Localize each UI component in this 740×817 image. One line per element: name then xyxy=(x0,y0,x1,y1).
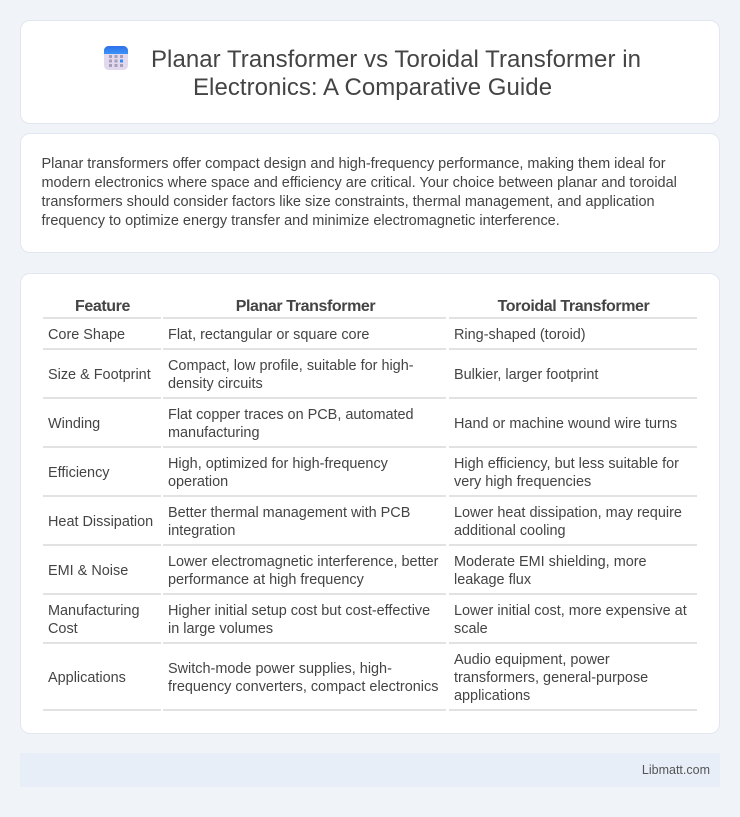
text: Compact, low profile, suitable for high- xyxy=(168,358,414,374)
text: High efficiency, but less suitable for xyxy=(454,456,679,472)
text: Better thermal management with PCB xyxy=(168,505,410,521)
text: frequency converters, compact electronics xyxy=(168,679,438,695)
row: Winding: Winding xyxy=(48,416,100,432)
row: Manufacturing Cost: Cost xyxy=(48,621,78,637)
text: scale xyxy=(454,621,488,637)
text: Ring-shaped (toroid) xyxy=(454,327,586,343)
text block: introduction: Planar transformers offer compact design and high-frequency performance, making them ideal for xyxy=(42,156,666,172)
text: in large volumes xyxy=(168,621,273,637)
table header: Feature: Feature xyxy=(75,298,130,315)
text: additional cooling xyxy=(454,523,566,539)
table header: Planar Transformer: Planar Transformer xyxy=(236,298,375,315)
title: Planar Transformer vs Toroidal Transformer in xyxy=(151,46,641,73)
text block: introduction xyxy=(42,156,677,229)
row: Core Shape: Core Shape xyxy=(48,327,125,343)
text: performance at high frequency xyxy=(168,572,364,588)
title: Electronics: A Comparative Guide xyxy=(193,74,552,101)
footer text: Libmatt.com xyxy=(642,763,710,777)
row: Size & Footprint: Size & Footprint xyxy=(48,367,151,383)
row: Manufacturing Cost xyxy=(48,603,140,637)
panel: comparison table xyxy=(20,273,720,734)
text: Lower heat dissipation, may require xyxy=(454,505,682,521)
footer bar xyxy=(20,753,720,787)
text: very high frequencies xyxy=(454,474,591,490)
text: leakage flux xyxy=(454,572,531,588)
text: Hand or machine wound wire turns xyxy=(454,416,677,432)
title xyxy=(151,46,641,101)
icon: calendar xyxy=(104,46,128,70)
row: Efficiency: Efficiency xyxy=(48,465,110,481)
text block: introduction: modern electronics where space and efficiency are critical. Your choice between planar and toroidal xyxy=(42,175,677,191)
text: Lower initial cost, more expensive at xyxy=(454,603,687,619)
row: Manufacturing Cost: Manufacturing xyxy=(48,603,140,619)
row: Heat Dissipation: Heat Dissipation xyxy=(48,514,153,530)
text: integration xyxy=(168,523,235,539)
text: Switch-mode power supplies, high- xyxy=(168,661,392,677)
panel: introduction xyxy=(20,133,720,253)
text: density circuits xyxy=(168,376,263,392)
table header: Toroidal Transformer: Toroidal Transformer xyxy=(498,298,649,315)
text: applications xyxy=(454,688,530,704)
text: Bulkier, larger footprint xyxy=(454,367,598,383)
text: Flat copper traces on PCB, automated xyxy=(168,407,414,423)
row: Applications: Applications xyxy=(48,670,126,686)
row: EMI & Noise: EMI & Noise xyxy=(48,563,128,579)
text block: introduction: frequency to optimize energy transfer and minimize electromagnetic interference. xyxy=(42,213,560,229)
text: Moderate EMI shielding, more xyxy=(454,554,647,570)
text: operation xyxy=(168,474,228,490)
text: Lower electromagnetic interference, better xyxy=(168,554,438,570)
text: Audio equipment, power xyxy=(454,652,610,668)
text: Flat, rectangular or square core xyxy=(168,327,369,343)
text: manufacturing xyxy=(168,425,260,441)
panel: title card xyxy=(20,20,720,124)
text: transformers, general-purpose xyxy=(454,670,648,686)
text block: introduction: transformers should consider factors like size constraints, thermal management, and application xyxy=(42,194,655,210)
text: Higher initial setup cost but cost-effective xyxy=(168,603,430,619)
text: High, optimized for high-frequency xyxy=(168,456,388,472)
